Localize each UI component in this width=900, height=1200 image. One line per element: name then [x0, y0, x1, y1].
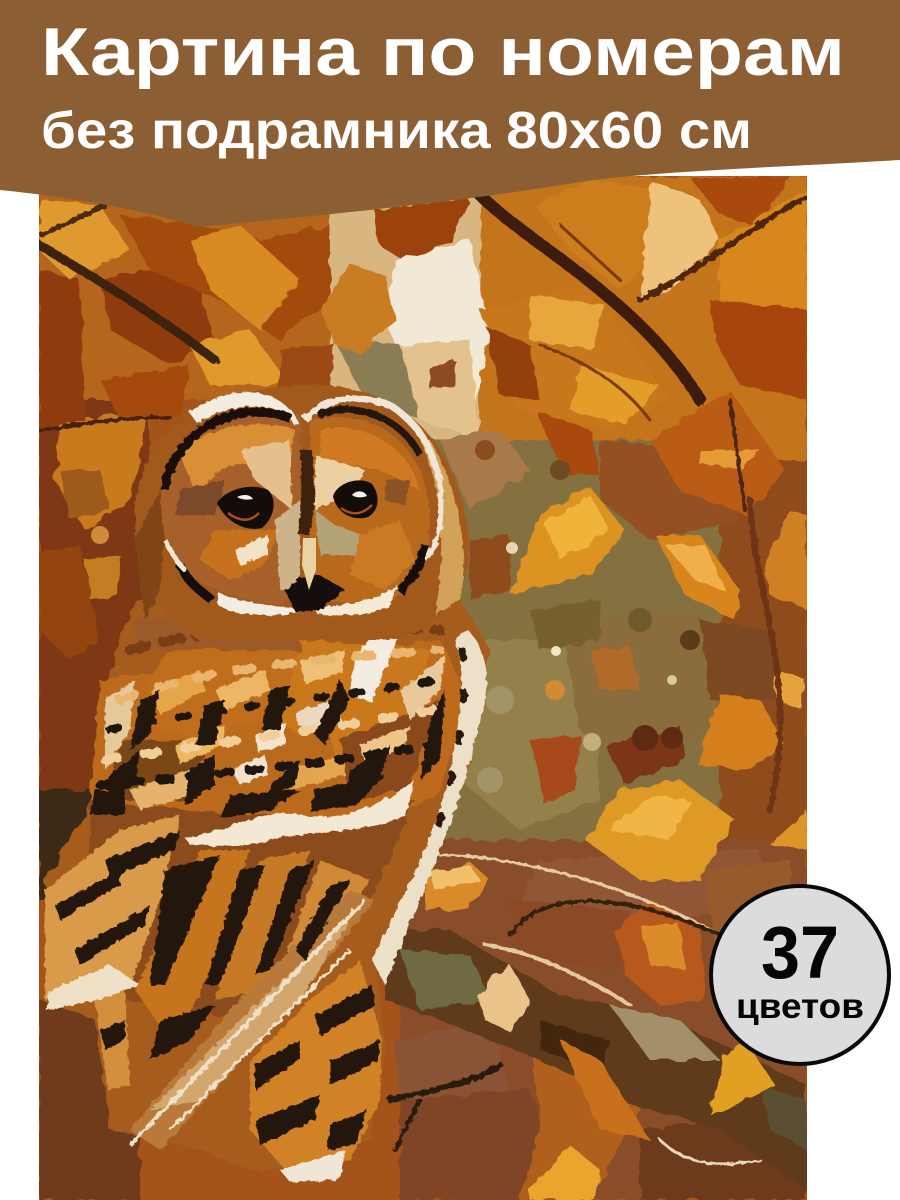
title: Картина по номерам: [41, 14, 845, 90]
painting: branches and twigs: [39, 195, 805, 1164]
owl eyes and beak: [217, 480, 378, 590]
painting: mossy main branch: [385, 930, 807, 1190]
owl central dark stripe: [298, 450, 315, 535]
painting: bokeh spots in the forest background: [91, 440, 700, 793]
painting: tawny owl among autumn leaves: [39, 176, 807, 1200]
subtitle: без подрамника 80х60 см: [41, 102, 752, 160]
badge label: цветов: [736, 987, 864, 1026]
owl chest markings: [90, 628, 487, 985]
badge: 37 colours: [711, 886, 889, 1064]
header banner: [0, 0, 900, 227]
owl rim: cream and black: [192, 395, 297, 425]
owl: [45, 385, 490, 1182]
owl left facial disc: [160, 411, 300, 605]
owl right eye: [333, 480, 378, 518]
painting leaves: upper right and centre: [320, 176, 807, 1200]
owl beak: [302, 538, 316, 590]
owl left eye: [217, 487, 274, 529]
owl lower face ruff: [218, 592, 305, 615]
owl right facial disc: [310, 417, 430, 605]
owl head: [135, 385, 469, 640]
owl body and wings: [45, 590, 490, 1170]
painting background: autumn foliage and blurred forest: [39, 176, 807, 1200]
badge number: 37: [761, 911, 839, 994]
owl wing feathers: [45, 815, 382, 1182]
